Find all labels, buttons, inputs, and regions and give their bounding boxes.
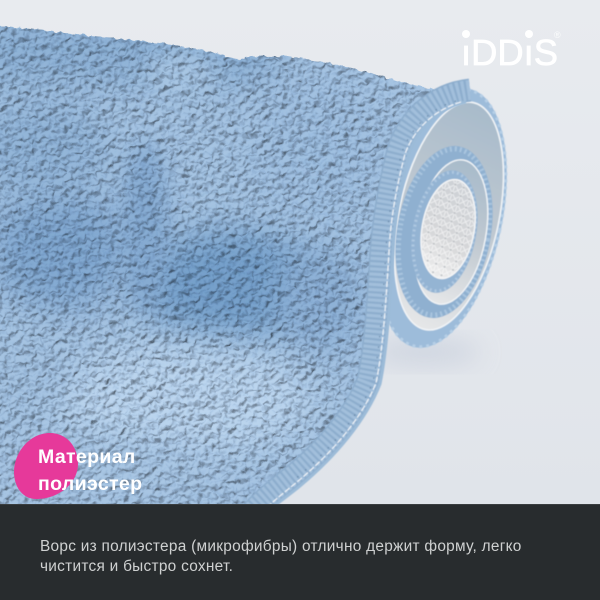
roll of mat (356, 76, 528, 360)
mat pile surface (0, 26, 434, 504)
photo: rolled blue bath mat (0, 26, 560, 504)
tonal patches (0, 15, 280, 85)
description text: Ворс из полиэстера (микрофибры) отлично держит форму, легко (40, 538, 522, 555)
description text (40, 538, 522, 575)
logo: IDDIS: ıDDıS (461, 32, 558, 73)
pile texture (0, 26, 431, 504)
inner hole with rubber backing (414, 175, 482, 283)
bottom description panel (0, 504, 600, 600)
outer coil edge (356, 76, 528, 360)
second coil edge (383, 138, 505, 326)
logo: IDDIS: ® (554, 30, 561, 40)
badge blob (14, 433, 78, 499)
badge label: Материал (38, 446, 136, 468)
back surface, first turn (376, 92, 522, 340)
third coil edge (402, 165, 487, 298)
cast shadow below roll (370, 338, 480, 366)
back surface, second turn (404, 154, 498, 310)
badge label: полиэстер (38, 473, 142, 495)
stitched binding along mat edge (250, 90, 470, 514)
badge label (38, 446, 142, 495)
description text: чистится и быстро сохнет. (40, 558, 233, 575)
